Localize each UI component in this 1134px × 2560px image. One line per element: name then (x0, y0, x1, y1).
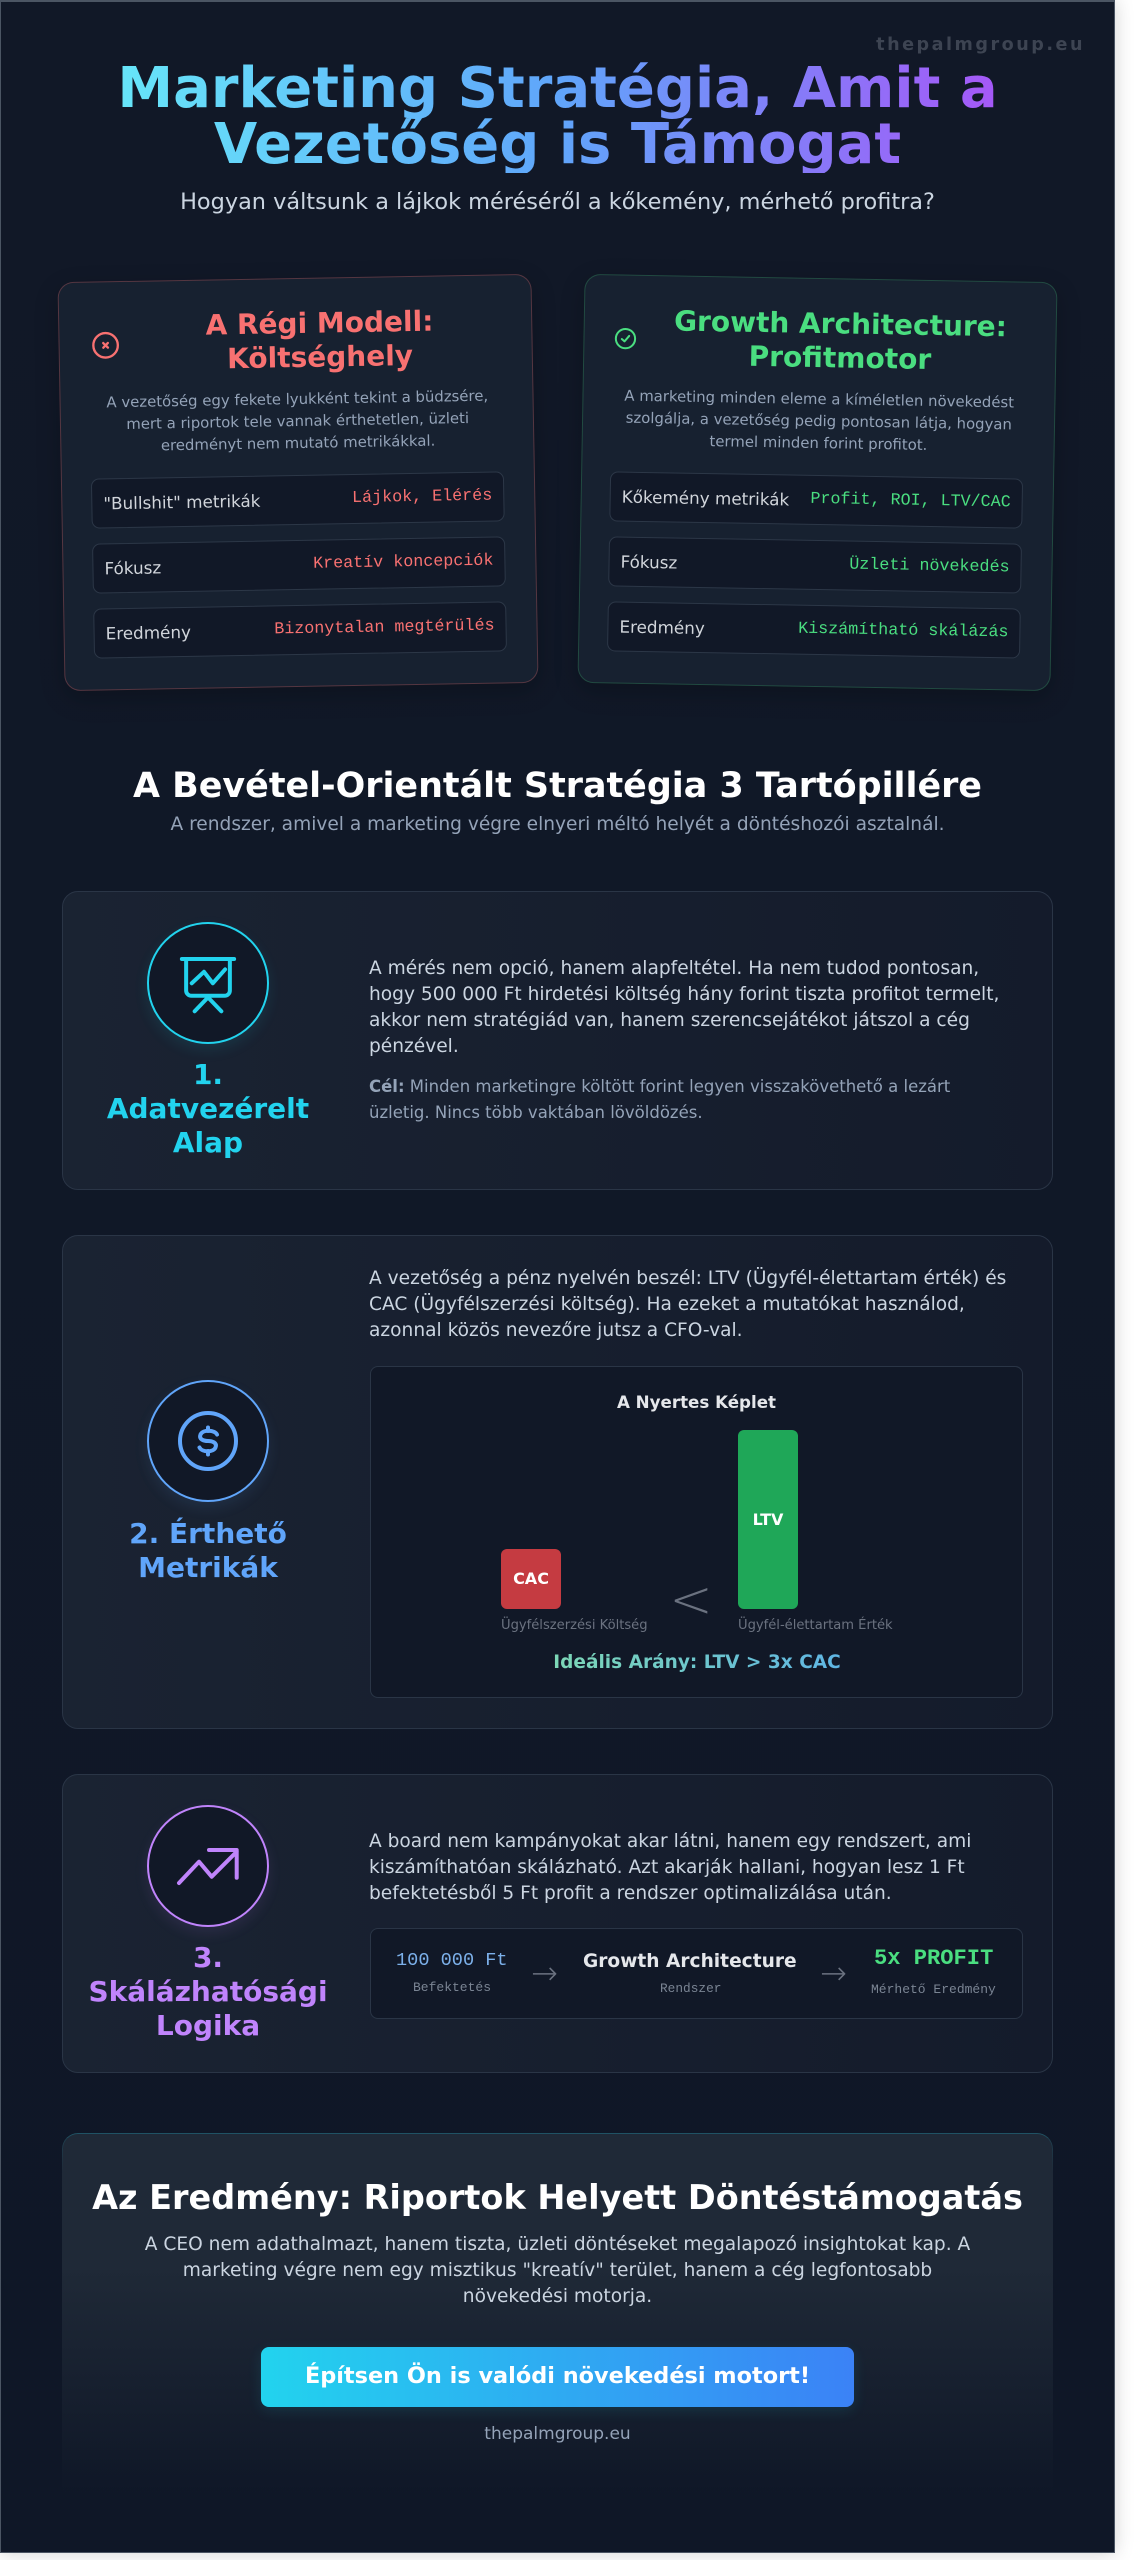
pillar 1 card (62, 891, 1053, 1190)
flow step: system value: Growth Architecture (583, 1951, 797, 1972)
pillar 2 card (62, 1235, 1053, 1729)
bar: LTV: LTV (753, 1510, 783, 1529)
row: metrics: Profit, ROI, LTV/CAC (810, 489, 1011, 512)
row: focus: Kreatív koncepciók (313, 551, 494, 573)
panel: pillar 2 (62, 1235, 1053, 1729)
old model description: eredményt nem mutató metrikákkal. (161, 432, 435, 454)
result heading: Az Eredmény: Riportok Helyett Döntéstámogatás (92, 2178, 1023, 2217)
top accent border (62, 2133, 1053, 2160)
pillar 1 text: akkor nem stratégiád van, hanem szerencsejátékot játszol a cég (369, 1010, 970, 1031)
row: focus (608, 536, 1022, 593)
pillar 1 title: 1. (193, 1058, 223, 1091)
row: focus: Fókusz (104, 557, 161, 578)
pillar 3 text (369, 1831, 971, 1904)
growth description: termel minden forint profitot. (709, 432, 928, 454)
section heading: A Bevétel-Orientált Stratégia 3 Tartópillére (133, 766, 982, 806)
row: result: Bizonytalan megtérülés (274, 616, 495, 639)
pillar 3 text: befektetésből 5 Ft profit a rendszer optimalizálása után. (369, 1883, 892, 1904)
pillar 3 text: A board nem kampányokat akar látni, hanem egy rendszert, ami (369, 1831, 971, 1852)
flow step: investment label: Befektetés (413, 1980, 491, 1995)
result paragraph: marketing végre nem egy misztikus "kreatív" terület, hanem a cég legfontosabb (183, 2260, 932, 2281)
row: result (93, 601, 507, 658)
result paragraph: növekedési motorja. (463, 2286, 652, 2307)
growth description (624, 386, 1014, 454)
row: focus: Fókusz (620, 551, 677, 572)
footer site: thepalmgroup.eu (484, 2424, 631, 2444)
panel: pillar 1 (62, 891, 1053, 1190)
arrow: → (820, 1954, 847, 1992)
heading: growth architecture: Growth Architecture: (674, 304, 1007, 343)
bar: LTV (738, 1430, 798, 1609)
bar: CAC (501, 1549, 561, 1609)
pillar 1 text (369, 958, 999, 1057)
icon: trending up (147, 1805, 269, 1927)
chart: winning formula (370, 1366, 1023, 1698)
pillar 2 title: Metrikák (138, 1551, 278, 1584)
button (261, 2347, 854, 2407)
pillar 2 text: A vezetőség a pénz nyelvén beszél: LTV (Ügyfél-élettartam érték) és (369, 1268, 1006, 1289)
row: metrics (91, 471, 505, 528)
old model description: mert a riportok tele vannak érthetetlen, üzleti (126, 409, 469, 433)
pillar 1 goal: üzletig. Nincs több vaktában lövöldözés. (369, 1103, 703, 1122)
heading: old model (205, 304, 434, 375)
pillar 3 title: Logika (156, 2009, 260, 2042)
panel: result call to action (62, 2133, 1053, 2442)
heading: growth architecture: Profitmotor (748, 339, 931, 375)
pillar 3 title (88, 1941, 328, 2042)
pillar 1 text: pénzével. (369, 1036, 459, 1057)
panel: growth architecture (577, 273, 1057, 690)
row: focus: Üzleti növekedés (849, 555, 1010, 577)
icon: dollar (147, 1380, 269, 1502)
pillar 1 goal (369, 1077, 950, 1122)
pillar 2 text: CAC (Ügyfélszerzési költség). Ha ezeket a mutatókat használod, (369, 1294, 965, 1315)
old model description: A vezetőség egy fekete lyukként tekint a büdzsére, (106, 386, 488, 411)
heading: old model: A Régi Modell: (205, 304, 434, 341)
row: result: Eredmény (105, 621, 191, 643)
less-than sign: < (669, 1570, 713, 1630)
row: metrics: "Bullshit" metrikák (103, 490, 261, 513)
row: metrics (609, 471, 1023, 528)
subtitle: Hogyan váltsunk a lájkok méréséről a kőkemény, mérhető profitra? (180, 189, 935, 215)
pillar 1 goal: Cél: Minden marketingre költött forint legyen visszakövethető a lezárt (369, 1077, 950, 1096)
pillar 3 title: 3. (193, 1941, 223, 1974)
pillar 1 title: Adatvezérelt (107, 1092, 309, 1125)
caption: CAC: Ügyfélszerzési Költség (501, 1618, 648, 1633)
ideal ratio: Ideális Arány: LTV > 3x CAC (553, 1652, 841, 1673)
arrow: → (531, 1954, 558, 1992)
caption: LTV: Ügyfél-élettartam Érték (738, 1618, 893, 1633)
chart title: A Nyertes Képlet (617, 1392, 776, 1412)
result paragraph (144, 2234, 970, 2307)
pillar 2 text: azonnal közös nevezőre jutsz a CFO-val. (369, 1320, 743, 1341)
flow step: profit value: 5x PROFIT (874, 1946, 993, 1971)
title: Marketing Stratégia, Amit a (117, 56, 998, 121)
row: focus (92, 536, 506, 593)
pillar 2 title (129, 1517, 287, 1584)
row: result (607, 601, 1021, 658)
bar: CAC: CAC (513, 1569, 549, 1588)
pillar 3 text: kiszámíthatóan skálázható. Azt akarják hallani, hogyan lesz 1 Ft (369, 1857, 965, 1878)
panel: old model (57, 273, 538, 690)
row: result: Eredmény (619, 616, 705, 638)
title (100, 61, 1015, 173)
pillar 2 title: 2. Érthető (129, 1517, 287, 1550)
pillar 1 text: A mérés nem opció, hanem alapfeltétel. Ha nem tudod pontosan, (369, 958, 979, 979)
button: Építsen Ön is valódi növekedési motort! (305, 2363, 810, 2389)
pillar 1 text: hogy 500 000 Ft hirdetési költség hány forint tiszta profitot termelt, (369, 984, 999, 1005)
pillar 3 card (62, 1774, 1053, 2073)
growth description: szolgálja, a vezetőség pedig pontosan látja, hogyan (626, 408, 1012, 433)
watermark: thepalmgroup.eu (876, 35, 1085, 55)
row: metrics: Kőkemény metrikák (622, 486, 789, 509)
flow step: investment value: 100 000 Ft (396, 1950, 508, 1971)
result paragraph: A CEO nem adathalmazt, hanem tiszta, üzleti döntéseket megalapozó insightokat kap. A (145, 2234, 970, 2255)
icon: presentation chart (147, 922, 269, 1044)
flow step: system label: Rendszer (660, 1981, 721, 1996)
flow: investment to profit (370, 1928, 1023, 2019)
row: metrics: Lájkok, Elérés (352, 486, 492, 508)
growth description: A marketing minden eleme a kíméletlen növekedést (624, 386, 1014, 411)
section subheading: A rendszer, amivel a marketing végre elnyeri méltó helyét a döntéshozói asztalnál. (170, 814, 945, 835)
old model description (106, 386, 488, 454)
icon: check in circle (614, 328, 636, 350)
heading: old model: Költséghely (227, 338, 413, 375)
pillar 1 title: Alap (173, 1126, 243, 1159)
icon: x in circle (92, 332, 119, 359)
pillar 2 text (369, 1267, 1006, 1341)
flow step: profit label: Mérhető Eredmény (871, 1982, 996, 1997)
row: result: Kiszámítható skálázás (798, 619, 1009, 642)
pillar 1 title (107, 1058, 309, 1159)
title: Vezetőség is Támogat (214, 112, 901, 177)
pillar 3 title: Skálázhatósági (88, 1975, 328, 2008)
heading: growth architecture (674, 304, 1007, 375)
